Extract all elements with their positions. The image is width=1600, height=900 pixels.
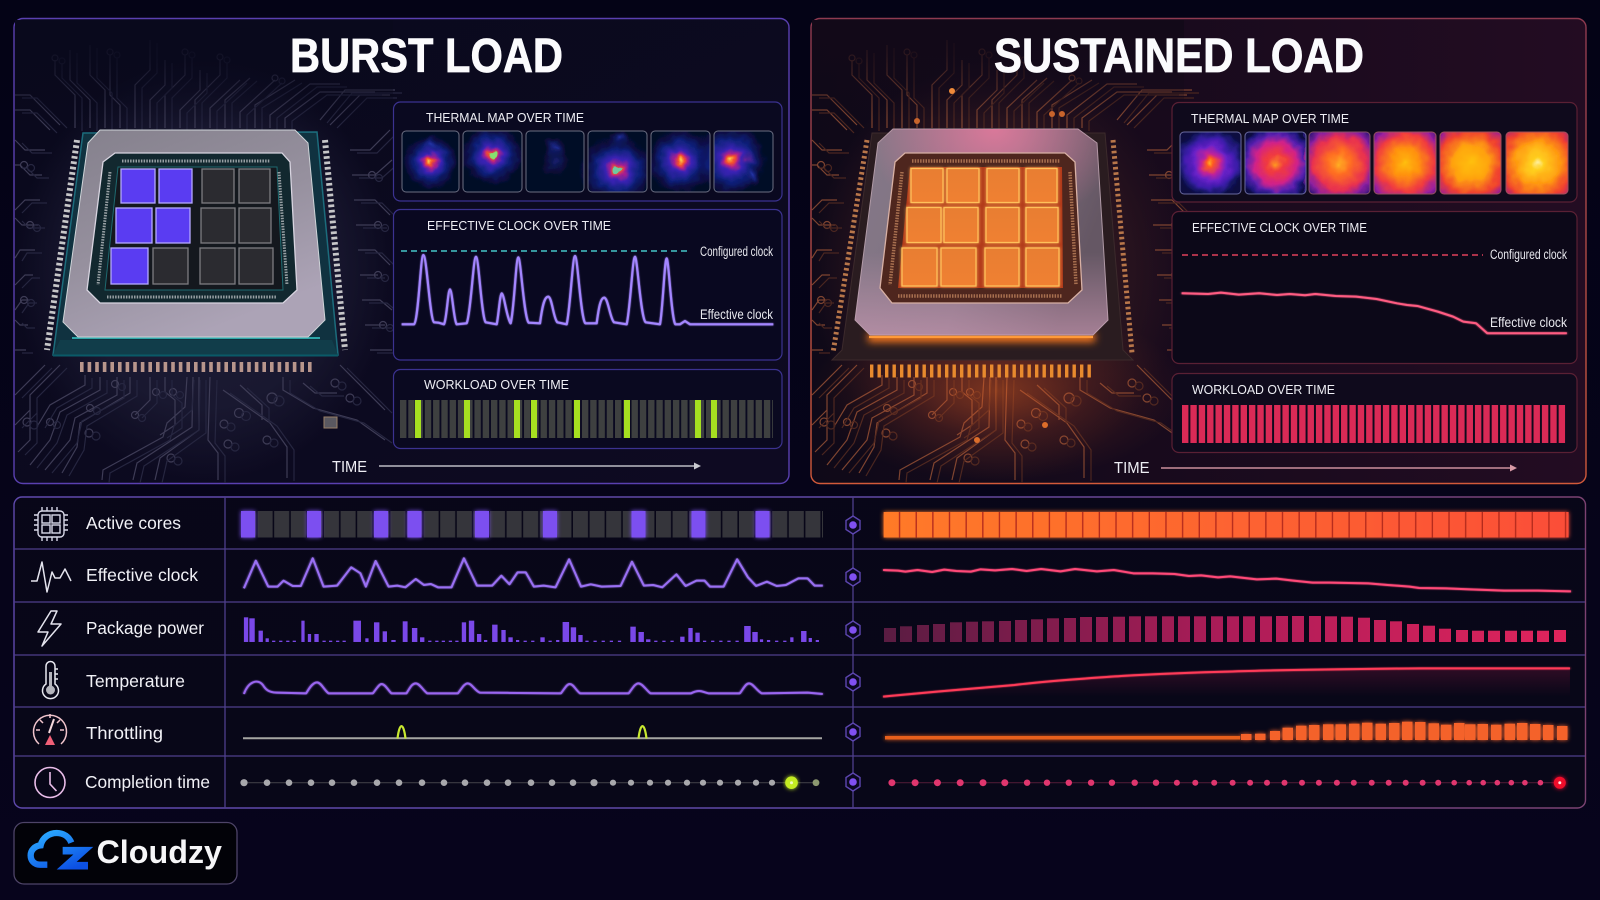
row: effective clock	[31, 558, 1571, 592]
active cores: sustained	[902, 168, 1059, 286]
wordmark: Cloudzy	[96, 834, 222, 870]
panel: workload, sustained	[1172, 374, 1577, 452]
row: throttling	[33, 714, 1567, 745]
label: time, burst: TIME	[332, 459, 367, 476]
burst active core bars	[241, 511, 823, 538]
cpu chip: burst	[47, 130, 345, 367]
sustained active core bars	[884, 512, 1569, 538]
panel: workload, burst	[394, 370, 782, 448]
panel: sustained load	[811, 18, 1586, 484]
icon: chip	[34, 507, 68, 541]
panel: burst load	[14, 18, 789, 484]
panel: thermal map, sustained	[1172, 102, 1577, 202]
heading: thermal map: THERMAL MAP OVER TIME	[426, 110, 584, 125]
panel frame: sustained	[811, 18, 1586, 484]
row: completion time	[35, 768, 1566, 798]
icon: thermometer	[42, 662, 58, 699]
arrow: time, sustained	[1161, 464, 1517, 472]
table frame	[14, 497, 1586, 808]
arrow: time, burst	[379, 462, 701, 470]
sustained power bars	[884, 616, 1566, 642]
sustained effective clock line	[883, 569, 1571, 591]
effective clock spike line	[402, 255, 773, 324]
configured clock dashed line	[1182, 254, 1483, 256]
label: completion time: Completion time	[85, 772, 210, 792]
label: active cores: Active cores	[86, 513, 181, 533]
label: effective clock: Effective clock	[1490, 315, 1567, 330]
row: active cores	[34, 507, 1569, 541]
label: time, sustained: TIME	[1114, 460, 1150, 477]
burst temperature line	[244, 682, 823, 694]
burst completion dots	[240, 776, 819, 789]
label: temperature: Temperature	[86, 671, 185, 691]
panel frame: burst	[14, 18, 789, 484]
heading: thermal map: THERMAL MAP OVER TIME	[1191, 111, 1349, 126]
workload bars: sustained	[1182, 405, 1567, 443]
panel: effective clock, burst	[394, 210, 782, 360]
label: effective clock: Effective clock	[86, 565, 198, 585]
heading: effective clock: EFFECTIVE CLOCK OVER TIME	[427, 218, 611, 233]
effective clock decline line	[1182, 293, 1567, 333]
title: sustained load: SUSTAINED LOAD	[994, 30, 1364, 83]
configured clock dashed line	[401, 250, 691, 252]
label: configured clock: Configured clock	[1490, 247, 1567, 262]
panel: effective clock, sustained	[1172, 212, 1577, 364]
icon: gauge	[33, 714, 67, 745]
icon: clock	[35, 768, 65, 798]
label: configured clock: Configured clock	[700, 244, 773, 259]
center hex markers	[846, 516, 860, 791]
heading: effective clock: EFFECTIVE CLOCK OVER TIME	[1192, 220, 1367, 235]
burst power bars	[244, 617, 819, 642]
table grid lines	[14, 497, 1585, 808]
logo badge: Cloudzy	[14, 822, 237, 884]
thermal thumbnails: sustained	[1180, 132, 1568, 194]
burst effective clock line	[244, 558, 823, 588]
label: package power: Package power	[86, 618, 204, 638]
sustained completion dots	[888, 777, 1566, 789]
cpu chip: sustained	[832, 129, 1133, 371]
circuit board background: burst	[15, 20, 402, 483]
row: package power	[38, 611, 1566, 646]
label: throttling: Throttling	[86, 723, 163, 743]
heading: workload: WORKLOAD OVER TIME	[1192, 382, 1335, 397]
title: burst load: BURST LOAD	[290, 30, 563, 83]
panel: thermal map, burst	[394, 102, 782, 204]
thermal thumbnails: burst	[402, 130, 774, 192]
heading: workload: WORKLOAD OVER TIME	[424, 377, 569, 392]
burst throttling line	[243, 726, 822, 738]
workload bars: burst	[400, 400, 773, 438]
sustained temperature area	[883, 668, 1570, 697]
icon: pulse	[31, 562, 71, 592]
sustained temperature line	[883, 668, 1570, 697]
icon: lightning bolt	[38, 611, 61, 646]
label: effective clock: Effective clock	[700, 307, 773, 322]
row: temperature	[42, 662, 1570, 699]
sustained throttling bars	[885, 722, 1568, 740]
comparison table	[14, 497, 1586, 808]
logo mark: cloud with z	[31, 833, 88, 866]
active and idle cores: burst	[111, 169, 273, 284]
circuit board background: sustained	[812, 20, 1199, 483]
